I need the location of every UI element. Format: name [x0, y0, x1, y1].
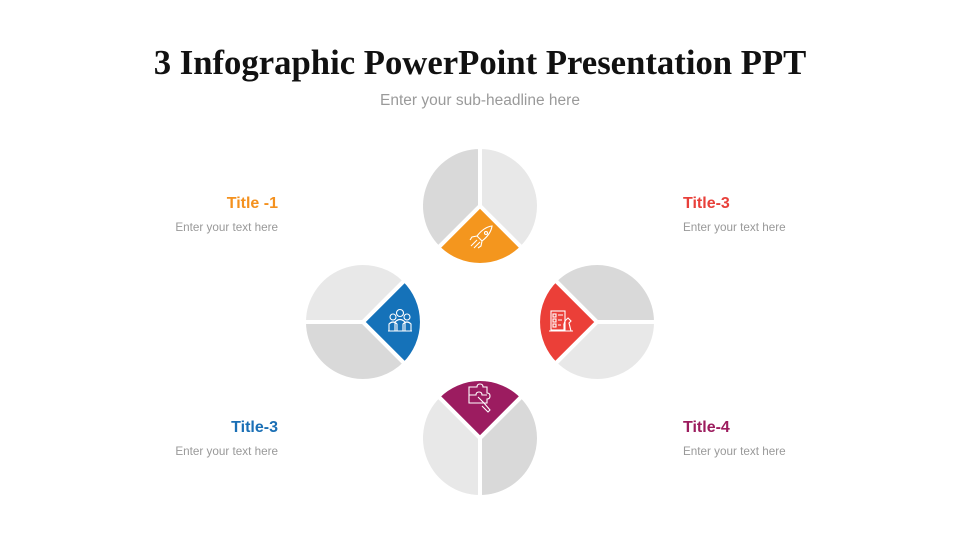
icon: strategy board: [549, 311, 573, 331]
text block: title-3 left: Title-3: [231, 419, 278, 436]
icon: rocket: [470, 226, 492, 248]
text block: title-3 right: Title-3: [683, 195, 730, 212]
text block: title-4: Enter your text here: [683, 445, 786, 458]
text block: title-3 right: Enter your text here: [683, 221, 786, 234]
text block: title-1: Title -1: [227, 195, 278, 212]
icon: puzzle: [469, 384, 490, 412]
circle: top: [421, 147, 539, 265]
text block: title-3 left: Enter your text here: [175, 445, 278, 458]
circle: bottom: [421, 379, 539, 497]
subtitle: Enter your sub-headline here: [380, 92, 580, 109]
circle: left: [304, 263, 422, 381]
text block: title-3 left: [175, 419, 278, 458]
text block: title-3 right: [683, 195, 786, 234]
text block: title-1: Enter your text here: [175, 221, 278, 234]
text block: title-4: Title-4: [683, 419, 730, 436]
icon: team: [388, 310, 412, 331]
text block: title-1: [175, 195, 278, 234]
title: 3 Infographic PowerPoint Presentation PPT: [154, 43, 806, 82]
circle: right: [538, 263, 656, 381]
text block: title-4: [683, 419, 786, 458]
